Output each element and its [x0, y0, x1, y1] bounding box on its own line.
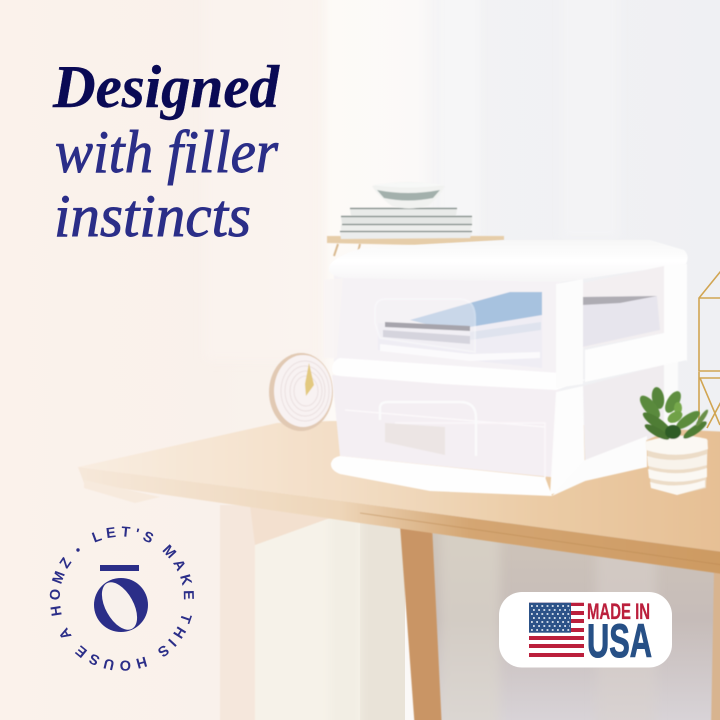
upper right paper stack — [582, 296, 660, 347]
headline — [52, 54, 280, 249]
headline: Designed — [52, 54, 280, 120]
pot — [645, 436, 708, 495]
lower front pillar — [550, 386, 585, 495]
bottom front band — [331, 456, 552, 496]
clock — [269, 353, 333, 431]
upper drawer clear front — [334, 274, 560, 378]
logo bar — [100, 565, 139, 571]
dot separator — [76, 548, 80, 552]
lower right post — [664, 360, 678, 434]
lower drawer handle — [380, 402, 476, 456]
storage drawer unit — [324, 240, 688, 496]
table legs — [220, 505, 720, 720]
lid — [329, 240, 688, 282]
potted succulent — [636, 386, 710, 495]
lower right band — [552, 436, 647, 496]
lower drawer clear front — [332, 375, 560, 478]
right post — [664, 264, 687, 362]
made in USA badge — [499, 592, 672, 668]
upper front pillar — [556, 279, 583, 388]
lower right window — [583, 364, 665, 464]
table — [78, 421, 720, 575]
USA text: USA — [587, 614, 652, 667]
upper drawer blue folder — [410, 292, 542, 335]
shelf with books and bowl — [327, 182, 504, 256]
curtain below table — [255, 500, 720, 720]
made in text: MADE IN — [587, 599, 650, 624]
headline: with filler — [55, 119, 279, 185]
leaves — [636, 386, 710, 442]
upper right band — [585, 330, 687, 382]
flag — [529, 603, 584, 657]
logo ring — [94, 578, 148, 632]
upper drawer paper stack — [378, 315, 542, 368]
headline: instincts — [54, 183, 251, 249]
left upper post — [324, 278, 343, 358]
gold frame — [699, 266, 720, 428]
circular tagline: LET'S MAKE THIS HOUSE A HOMZ — [50, 526, 194, 671]
upper drawer handle — [375, 299, 475, 352]
middle band — [332, 358, 585, 390]
upper right window — [583, 266, 664, 348]
circular brand logo — [50, 526, 194, 671]
